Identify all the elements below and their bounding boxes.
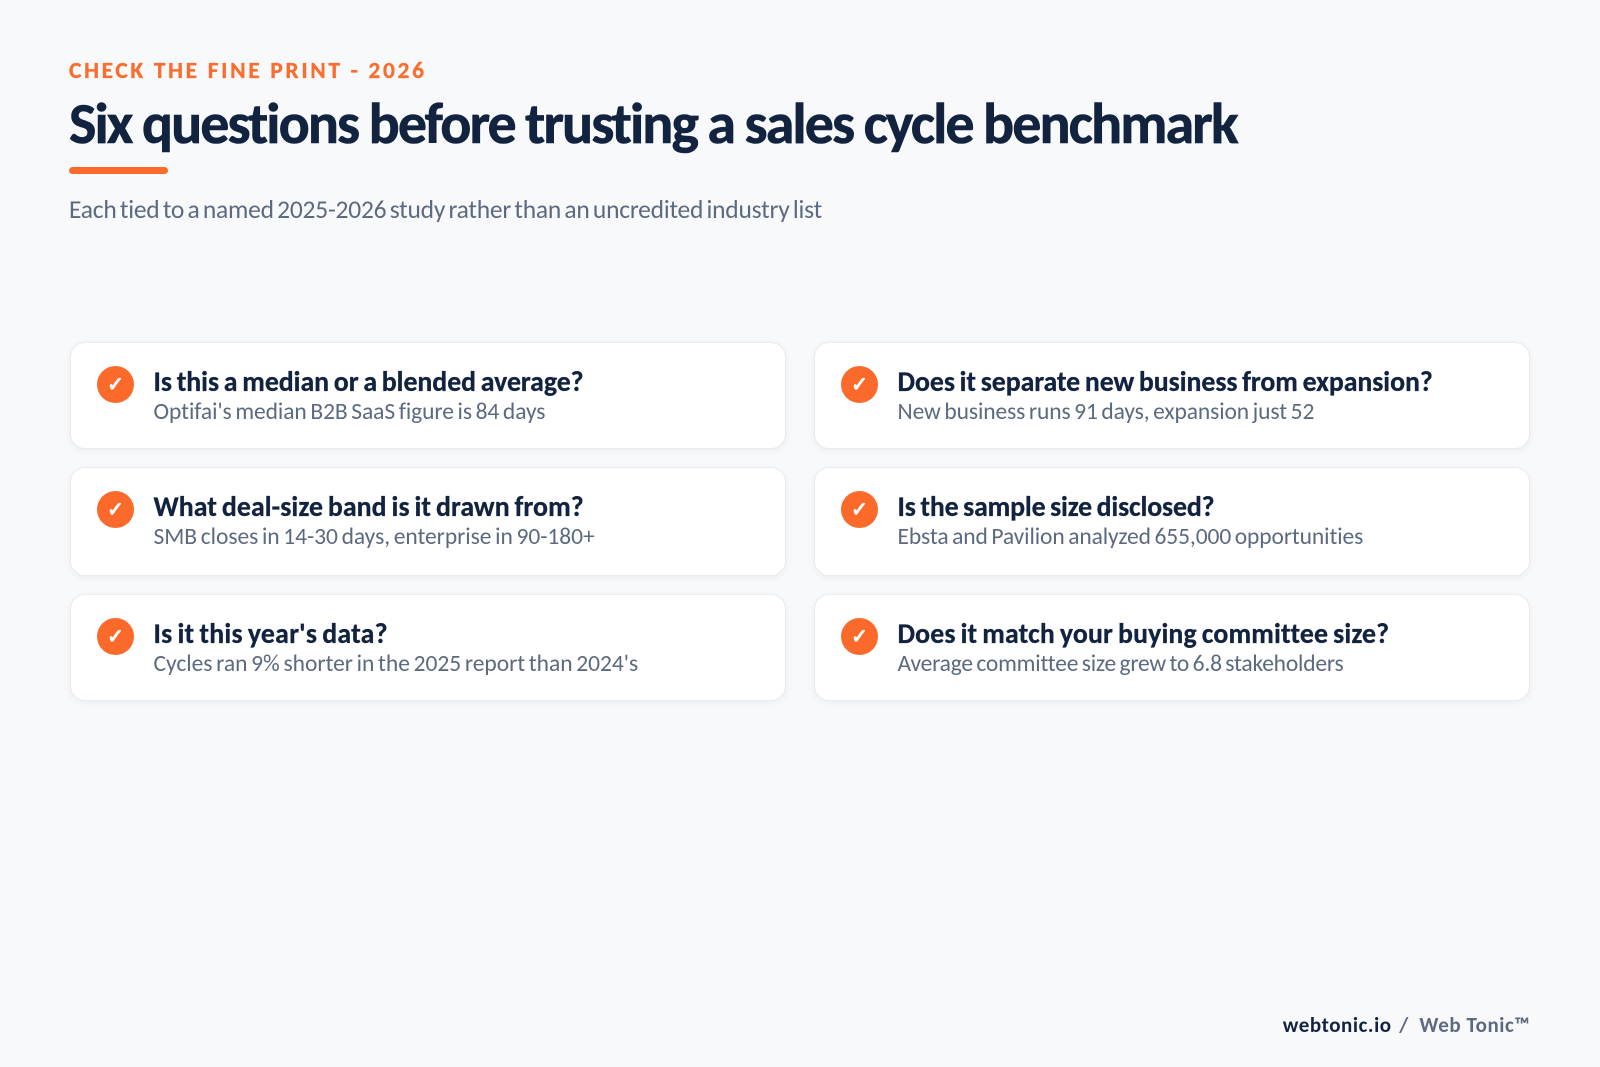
- answer: Average committee size grew to 6.8 stakeholders: [898, 650, 1343, 678]
- title: Six questions before trusting a sales cycle benchmark: [69, 88, 1237, 158]
- answer: Cycles ran 9% shorter in the 2025 report than 2024's: [154, 650, 638, 678]
- panel: median or blended average: [70, 342, 786, 449]
- accent underline: [69, 167, 168, 174]
- icon: check: [841, 366, 878, 403]
- answer: SMB closes in 14-30 days, enterprise in 90-180+: [154, 523, 595, 551]
- icon: check: [97, 366, 134, 403]
- icon: check: ✓: [851, 497, 868, 521]
- question: Is it this year's data?: [154, 618, 388, 650]
- icon: check: ✓: [107, 624, 124, 648]
- panel: deal-size band: [70, 467, 786, 576]
- panel: sample size: [814, 467, 1530, 576]
- question: Does it match your buying committee size?: [898, 618, 1389, 650]
- icon: check: [97, 618, 134, 655]
- icon: check: ✓: [851, 624, 868, 648]
- icon: check: [97, 491, 134, 528]
- answer: New business runs 91 days, expansion just 52: [898, 398, 1314, 426]
- eyebrow: CHECK THE FINE PRINT - 2026: [69, 57, 427, 85]
- panel: buying committee size: [814, 594, 1530, 701]
- panel: this year's data: [70, 594, 786, 701]
- subtitle: Each tied to a named 2025-2026 study rather than an uncredited industry list: [69, 194, 822, 224]
- icon: check: ✓: [851, 372, 868, 396]
- question: What deal-size band is it drawn from?: [154, 490, 584, 524]
- icon: check: [841, 618, 878, 655]
- question: Is this a median or a blended average?: [154, 366, 584, 398]
- panel: new business vs expansion: [814, 342, 1530, 449]
- question: Does it separate new business from expansion?: [898, 366, 1433, 398]
- footer credit: webtonic.io / Web Tonic™: [1283, 1012, 1530, 1038]
- icon: check: [841, 491, 878, 528]
- answer: Optifai's median B2B SaaS figure is 84 days: [154, 398, 545, 426]
- question: Is the sample size disclosed?: [898, 490, 1214, 524]
- answer: Ebsta and Pavilion analyzed 655,000 opportunities: [898, 523, 1363, 551]
- icon: check: ✓: [107, 372, 124, 396]
- icon: check: ✓: [107, 497, 124, 521]
